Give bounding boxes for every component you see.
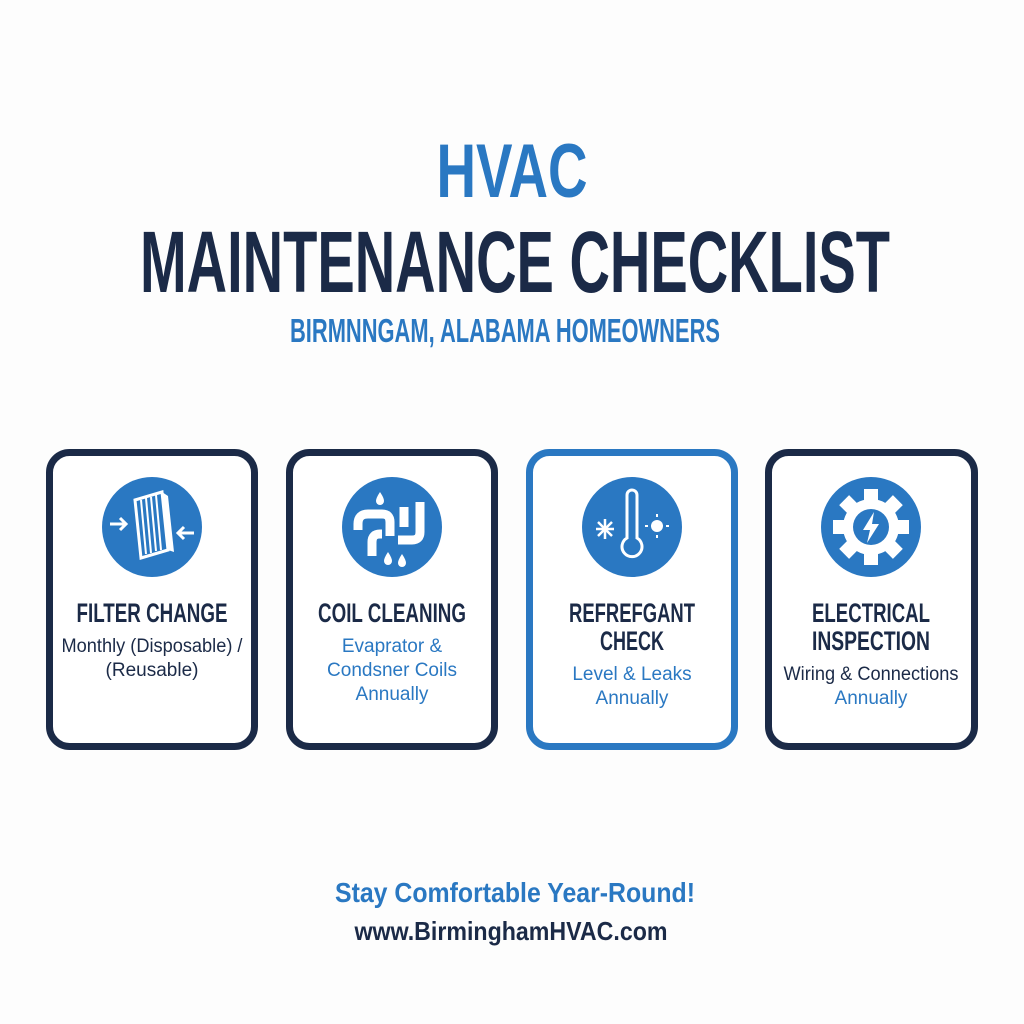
text block: Monthly (Disposable) / (62, 636, 243, 657)
panel: refrigerant check (530, 452, 734, 746)
icon: thermometer (582, 477, 682, 577)
heading: ELECTRICAL (812, 598, 930, 628)
text block: Annually (596, 688, 669, 709)
panel: filter change (50, 452, 254, 746)
panel: coil cleaning (290, 452, 494, 746)
text block (784, 664, 958, 709)
text block: Level & Leaks (572, 664, 692, 685)
heading: COIL CLEANING (318, 598, 466, 628)
text block (62, 636, 243, 681)
subtitle: BIRMNNGAM, ALABAMA HOMEOWNERS (290, 312, 720, 349)
text block: Annually (835, 688, 908, 709)
footer url: www.BirminghamHVAC.com (354, 916, 668, 946)
text block (572, 664, 692, 709)
panel: electrical inspection (768, 452, 974, 746)
text block: Wiring & Connections (784, 664, 958, 685)
text block: Evaprator & (342, 636, 442, 657)
icon: pipes (342, 477, 442, 577)
heading: FILTER CHANGE (76, 598, 228, 628)
footer tagline: Stay Comfortable Year-Round! (335, 877, 695, 908)
panel: electrical inspection: INSPECTION (812, 626, 930, 656)
icon: filter (102, 477, 202, 577)
text block: (Reusable) (106, 660, 198, 681)
text block: Condsner Coils (327, 660, 457, 681)
text block: Annually (356, 684, 429, 705)
panel: refrigerant check: CHECK (600, 626, 664, 656)
title: HVAC: HVAC (436, 129, 588, 214)
icon: gear bolt (817, 473, 925, 581)
text block (327, 636, 457, 705)
heading: REFREFGANT (569, 598, 695, 628)
